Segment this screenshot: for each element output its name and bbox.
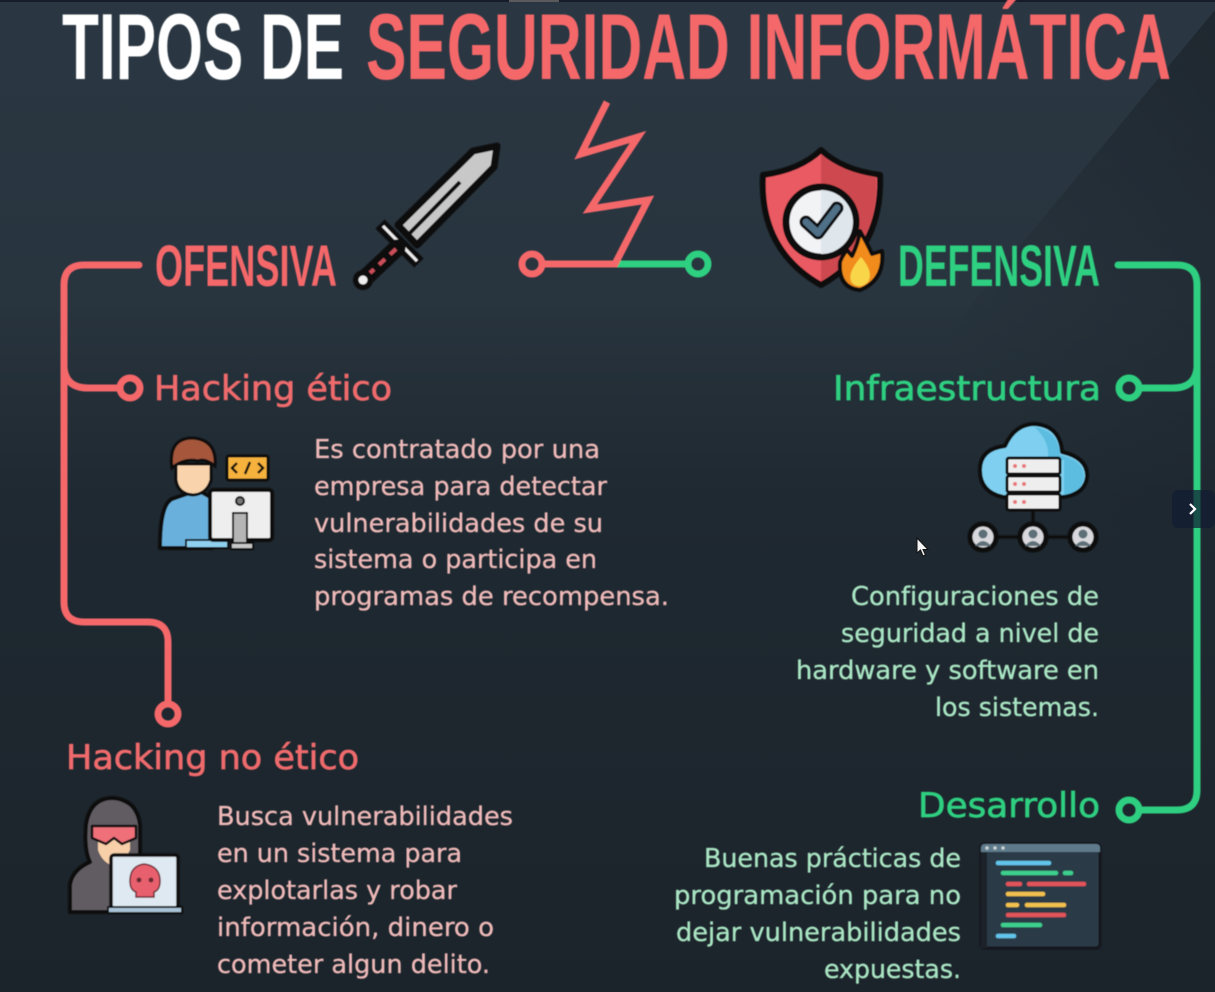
connector: offensive branch lines [64,265,178,724]
heading: desarrollo: Desarrollo [918,786,1100,826]
text: desarrollo description [674,844,961,985]
text: hacking ético description: sistema o participa en [314,545,597,575]
text: desarrollo description: Buenas prácticas de [704,844,961,874]
heading: infraestructura: Infraestructura [833,369,1101,409]
connector: defensive branch lines [1118,265,1197,820]
text: desarrollo description: programación para no [674,881,961,911]
text: hacking ético description: vulnerabilidades de su [314,509,603,539]
text: hacking no ético description: cometer algun delito. [217,950,490,980]
next slide button [1172,490,1215,528]
icon: shield with fire [763,150,882,290]
text: hacking no ético description: Busca vulnerabilidades [217,802,513,832]
text: infraestructura description: los sistemas. [935,693,1099,723]
text: hacking ético description: programas de recompensa. [314,582,669,612]
text: desarrollo description: dejar vulnerabilidades [676,918,961,948]
icon: sword [353,146,497,290]
text: hacking no ético description [217,802,513,980]
lightning bolt connector [522,102,708,274]
text: hacking ético description: empresa para detectar [314,472,607,502]
text: infraestructura description: hardware y software en [796,656,1099,686]
text: infraestructura description: seguridad a nivel de [841,619,1099,649]
text: infraestructura description [796,582,1099,723]
text: hacking no ético description: en un sistema para [217,839,462,869]
title [62,0,1171,99]
icon: mouse cursor [917,538,928,556]
heading: hacking ético: Hacking ético [154,369,392,409]
text: hacking ético description [314,435,669,612]
icon: ethical hacker at computer [160,438,272,549]
heading: ofensiva: OFENSIVA [155,234,337,299]
icon: cloud servers and users [970,424,1096,550]
icon: code window [981,844,1100,948]
heading: hacking no ético: Hacking no ético [66,738,359,778]
text: hacking no ético description: explotarlas y robar [217,876,457,906]
text: desarrollo description: expuestas. [824,955,961,985]
icon: malicious hacker with laptop [70,798,182,913]
text: hacking ético description: Es contratado por una [314,435,600,465]
text: hacking no ético description: información, dinero o [217,913,494,943]
text: infraestructura description: Configuraciones de [851,582,1099,612]
